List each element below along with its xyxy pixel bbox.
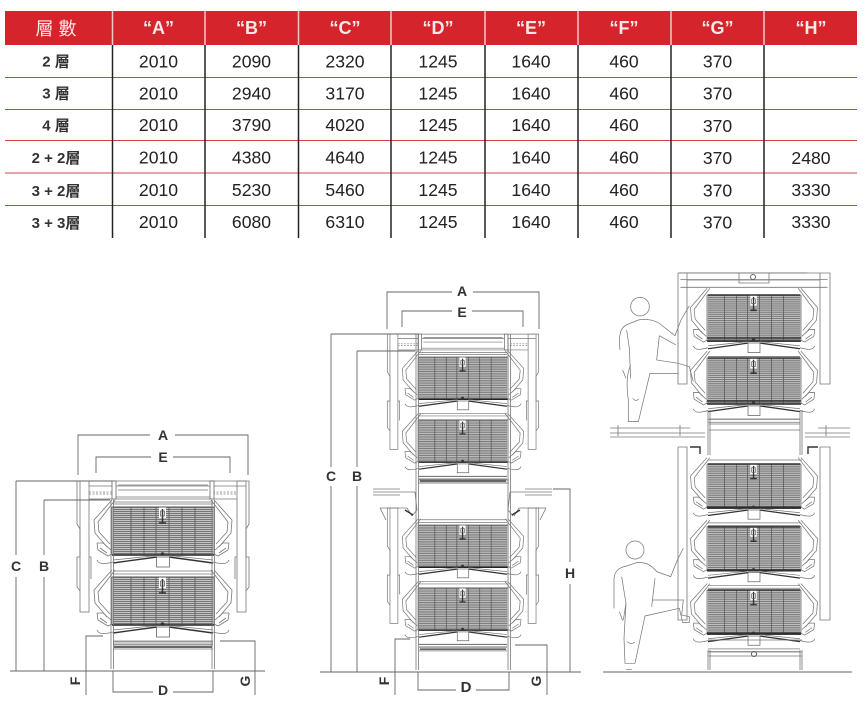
table row: 2+2 tiers: 1245: [418, 148, 458, 168]
support posts: [416, 334, 510, 670]
table row: 2 tiers: 2 層: [42, 54, 70, 70]
table row: 3+3 tiers: 2010: [139, 212, 178, 232]
table row: 3+2 tiers: 3 + 2層: [32, 183, 80, 200]
table row: 3 tiers: 1640: [511, 84, 551, 104]
table row: 3+2 tiers: 1245: [418, 180, 458, 200]
table row: 2 tiers: 1640: [511, 52, 551, 72]
table row: 3 tiers: 3170: [325, 84, 365, 104]
table row: 3+3 tiers: 3 + 3層: [32, 215, 80, 232]
table row: 2+2 tiers: 2010: [139, 148, 178, 168]
table row: 3+3 tiers: 460: [609, 212, 639, 232]
table header row: [5, 11, 857, 45]
dimension labels: D: [461, 679, 472, 696]
dimension labels: [11, 427, 253, 698]
table row: 2 tiers: 460: [609, 52, 639, 72]
table row: 3+2 tiers: 2010: [139, 180, 178, 200]
table row: 4 tiers: 3790: [232, 115, 271, 135]
dimension labels: F: [67, 676, 83, 685]
table row: 3 tiers: 370: [703, 84, 732, 104]
table row: 2 tiers: 370: [703, 52, 732, 72]
table grid lines: [5, 45, 857, 238]
dimension labels: E: [158, 449, 168, 465]
table header row: “E”: [516, 18, 546, 38]
dimension labels: B: [39, 558, 49, 574]
table row: 3+3 tiers: 6310: [325, 212, 365, 232]
table header row: “G”: [701, 18, 734, 38]
table row: 2 tiers: 2090: [232, 52, 271, 72]
table header row: 層 數: [35, 19, 77, 39]
table row: 2+2 tiers: 4380: [232, 148, 271, 168]
table header row: “H”: [796, 18, 826, 38]
table header row: “D”: [422, 18, 454, 38]
table row: 3+3 tiers: 1245: [418, 212, 458, 232]
table row: 3+2 tiers: 5230: [232, 180, 271, 200]
centre connector section: [610, 410, 850, 460]
table row: 4 tiers: 1245: [418, 115, 458, 135]
table row: 3+3 tiers: 1640: [511, 212, 551, 232]
table row: 2 tiers: 2010: [139, 52, 178, 72]
table row: 2+2 tiers: 1640: [511, 148, 551, 168]
table row: 3 tiers: 2940: [232, 84, 271, 104]
table row: 3+3 tiers: 3330: [791, 212, 831, 232]
table row: 3+3 tiers: 370: [703, 212, 732, 232]
table row: 3+3 tiers: 6080: [232, 212, 271, 232]
table row: 2+2 tiers: 460: [609, 148, 639, 168]
dimension labels: C: [11, 558, 21, 574]
upper cage stack: [678, 273, 830, 430]
table: dimensions by tier count: [5, 11, 857, 238]
table row: 2 tiers: [42, 52, 732, 72]
table row: 3+3 tiers: [32, 212, 831, 232]
table row: 4 tiers: 1640: [511, 115, 551, 135]
table row: 3+2 tiers: 1640: [511, 180, 551, 200]
table row: 3 tiers: 1245: [418, 84, 458, 104]
dimension labels: C: [326, 468, 336, 484]
table row: 2 tiers: 1245: [418, 52, 458, 72]
dimension lines: [10, 435, 265, 695]
dimension labels: G: [237, 675, 253, 686]
dimension labels: D: [158, 682, 168, 698]
table row: 3 tiers: [42, 84, 732, 104]
dimension labels: A: [457, 283, 467, 299]
lower cage stack: [373, 489, 552, 651]
table header row: “A”: [143, 18, 174, 38]
table row: 3 tiers: 460: [609, 84, 639, 104]
table row: 3+2 tiers: 5460: [325, 180, 365, 200]
table row: 4 tiers: 4020: [325, 115, 365, 135]
dimension labels: E: [457, 304, 467, 320]
dimension labels: F: [376, 676, 392, 685]
table row: 2+2 tiers: 4640: [325, 148, 365, 168]
dimension labels: B: [352, 468, 362, 484]
table row: 3+2 tiers: [32, 180, 831, 200]
table row: 2+2 tiers: 370: [703, 148, 732, 168]
dimension labels: A: [158, 427, 168, 443]
table header row: “C”: [330, 18, 360, 38]
dimension labels: H: [565, 565, 575, 581]
cage structure: [77, 481, 249, 669]
diagram: 2+2 tier cage elevation: [320, 283, 581, 696]
table row: 3+2 tiers: 370: [703, 180, 732, 200]
table row: 4 tiers: [42, 115, 732, 136]
table row: 3 tiers: 3 層: [42, 86, 70, 102]
dimension lines: [320, 292, 581, 695]
diagram: 2-tier cage elevation: [10, 427, 265, 698]
table row: 3+2 tiers: 3330: [791, 180, 831, 200]
dimension labels: [326, 283, 575, 696]
table row: 2 tiers: 2320: [325, 52, 365, 72]
table row: 4 tiers: 370: [703, 116, 732, 136]
icon: upper worker figure: [619, 297, 693, 422]
table row: 4 tiers: 4 層: [42, 118, 70, 134]
dimension labels: G: [528, 675, 544, 686]
icon: lower worker figure: [614, 541, 689, 669]
table row: 2+2 tiers: 2 + 2層: [32, 150, 80, 167]
table row: 4 tiers: 2010: [139, 115, 178, 135]
upper cage stack: [387, 334, 539, 483]
table row: 2+2 tiers: [32, 148, 831, 168]
table row: 3+2 tiers: 460: [609, 180, 639, 200]
table row: 2+2 tiers: 2480: [791, 148, 831, 168]
table header row: “F”: [610, 18, 638, 38]
lower cage stack: [678, 447, 830, 670]
ground line: [603, 671, 852, 673]
table row: 3 tiers: 2010: [139, 84, 178, 104]
diagram: 3+3 tier cage with workers: [603, 273, 852, 672]
table header row: “B”: [236, 18, 267, 38]
table row: 4 tiers: 460: [609, 115, 639, 135]
